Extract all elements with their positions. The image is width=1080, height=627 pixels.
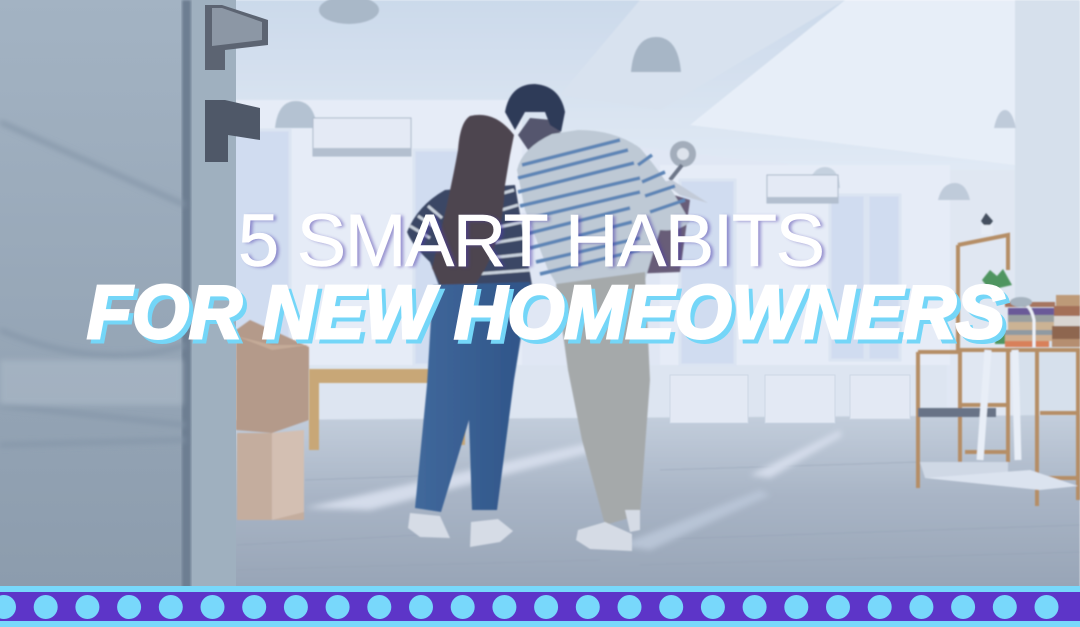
man's trousers [556, 272, 650, 525]
shelving unit [918, 213, 1080, 506]
plants [982, 269, 1012, 288]
ceiling lamps [275, 0, 1016, 200]
box held by man [625, 180, 690, 274]
man's shoes [576, 522, 632, 551]
windows [232, 130, 900, 365]
desk lamp [1015, 303, 1034, 347]
fan in the box [662, 141, 708, 203]
woman's hair [432, 115, 514, 292]
title line 1: 5 SMART HABITS [241, 200, 828, 283]
books [1005, 295, 1080, 347]
title line 2: FOR NEW HOMEOWNERS [87, 270, 1005, 354]
wall panels under windows [670, 375, 910, 423]
door hinges [205, 5, 268, 70]
title [87, 199, 1009, 358]
air conditioners [313, 118, 838, 203]
wooden bench [309, 369, 465, 450]
door [0, 0, 268, 590]
woman's striped top [407, 185, 532, 288]
woman's jeans [415, 282, 530, 512]
title line 1: 5 SMART HABITS [238, 199, 825, 282]
man's sweater [517, 130, 690, 290]
title line 2: FOR NEW HOMEOWNERS [91, 274, 1009, 358]
man's head [505, 84, 565, 160]
room background [225, 0, 1080, 590]
moving boxes [236, 320, 309, 520]
couple [407, 84, 708, 551]
bottom decorative band [0, 586, 1080, 627]
woman's shoes [408, 513, 450, 538]
